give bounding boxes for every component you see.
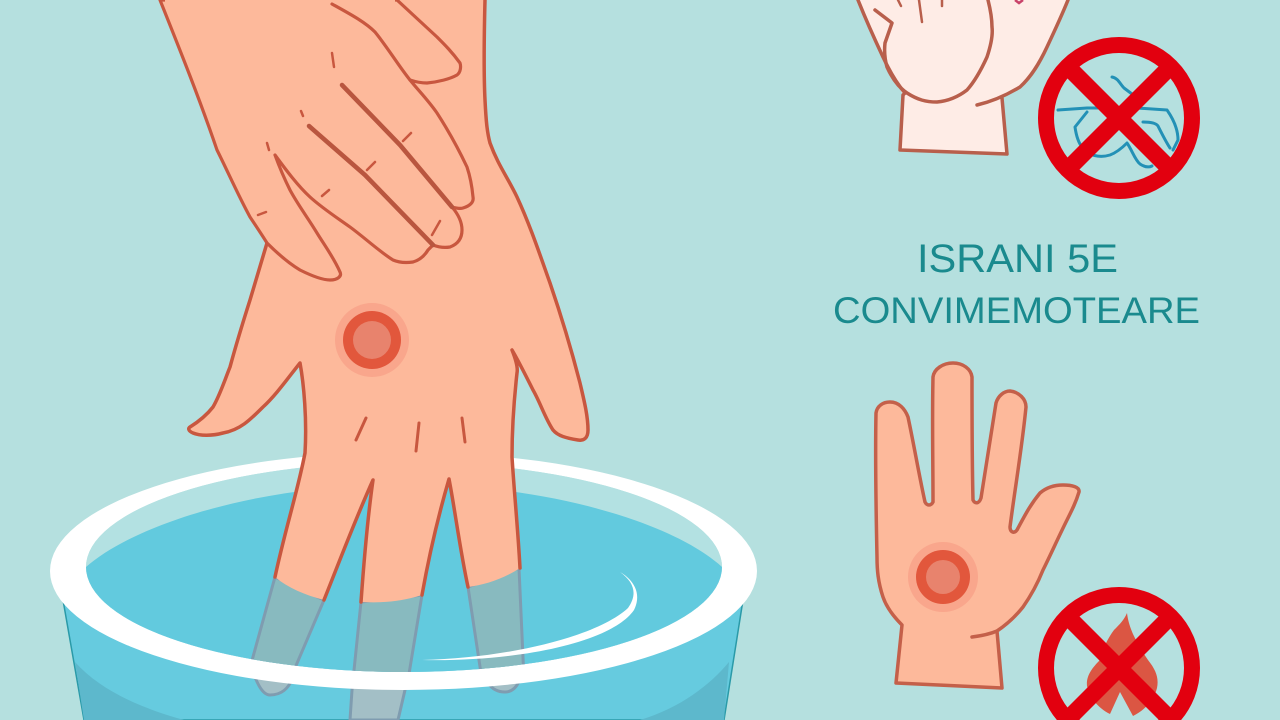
pale hand outline [858,0,1068,154]
lower hand in water [160,0,588,602]
upper hand holding wrist [160,0,473,280]
red cross [1068,617,1170,719]
palm fold [875,0,992,102]
water swirl [422,572,637,660]
flame [1087,613,1158,716]
submerged fingers [248,568,524,680]
submerged finger tips below rim [250,660,524,720]
hand skin [160,0,588,602]
prohibition icon: no fire [1046,595,1192,720]
burn mark [335,303,409,377]
water surface [86,484,722,680]
red ring [1046,45,1192,191]
knuckle creases [356,418,465,451]
palm lines [898,0,942,22]
caption line 2: CONVIMEMOTEARE [833,290,1200,331]
bowl of water [50,452,757,720]
pink mark [1015,0,1023,3]
hand outline [189,0,588,602]
red cross [1068,67,1170,169]
hand outline [876,363,1079,688]
small knuckle marks [258,53,440,235]
upper hand fill and outline [160,0,473,280]
upper right hand icon [858,0,1068,154]
bowl body [63,600,743,720]
caption line 1: ISRANI 5E [917,237,1118,281]
bowl shaded base [75,662,729,720]
burn mark [908,542,978,612]
inner bowl wall [86,462,722,672]
white bowl rim [50,452,757,690]
prohibition icon: no ice [1046,45,1192,191]
thick finger creases [309,85,452,245]
red ring [1046,595,1192,720]
caption heading [833,237,1200,331]
blue squiggle [1058,77,1178,167]
lower right hand icon with burn [876,363,1079,688]
finger separation lines [332,4,410,80]
hand palm [876,363,1079,688]
pale hand shape [858,0,1068,154]
